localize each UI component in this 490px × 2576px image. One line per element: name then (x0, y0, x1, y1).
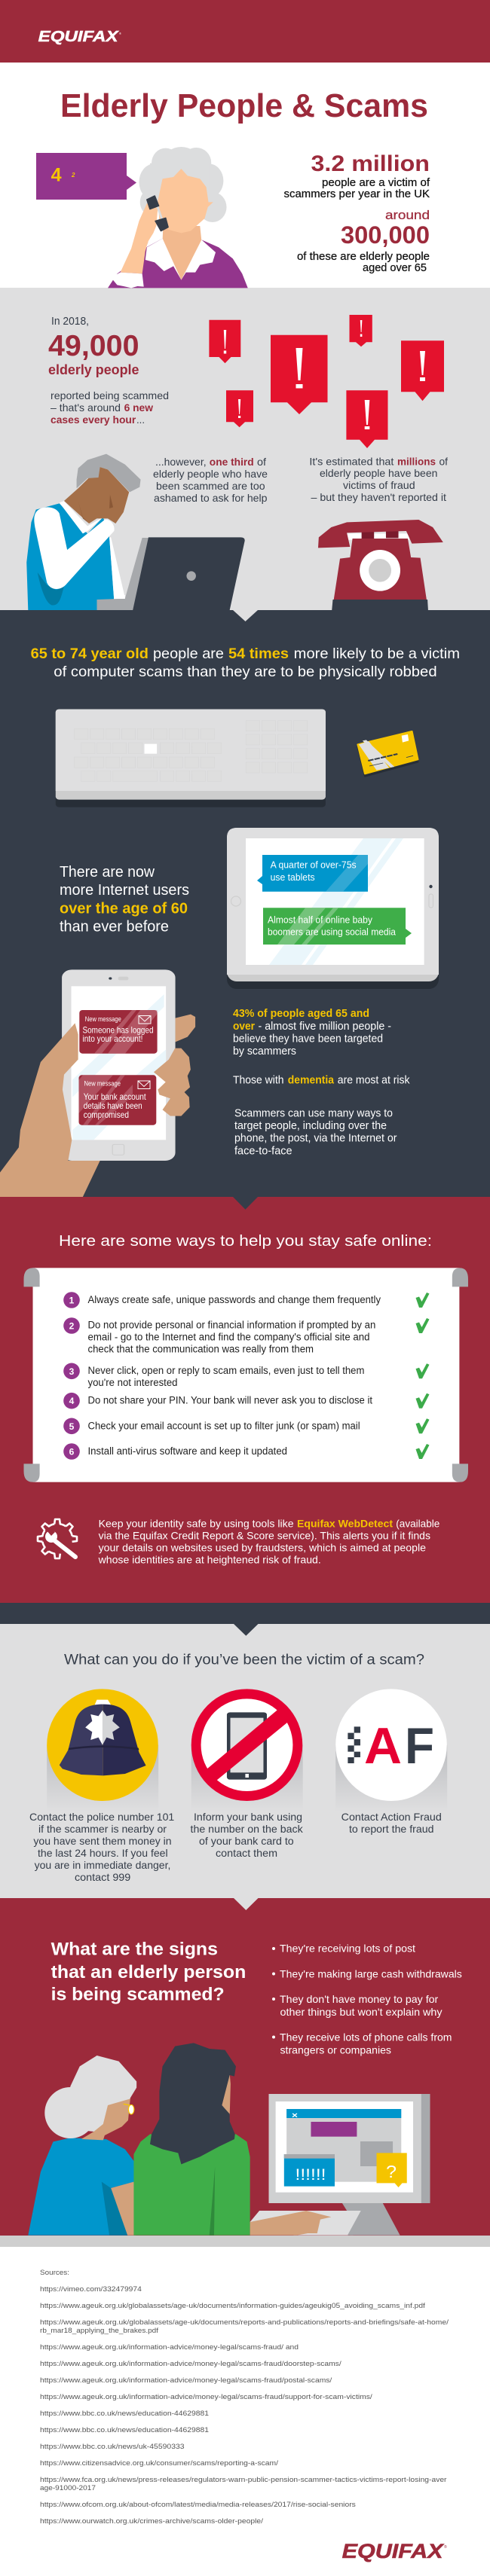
text: more internet users over 60 (60, 863, 189, 935)
blue message bubble: use tablets (271, 872, 315, 883)
item 1: 1 (69, 1296, 75, 1306)
text: many ways to target: Scammers can use many ways to (234, 1106, 393, 1119)
item 6: Install anti-virus software and keep it updated (87, 1445, 287, 1457)
stat: 49,000 elderly people (48, 315, 169, 426)
text: contact police: the last 24 hours. If you feel (38, 1847, 168, 1859)
scroll panel shape (24, 1268, 468, 1482)
stat: 3.2 million: scammers per year in the UK (283, 188, 430, 200)
green message bubble (263, 908, 412, 945)
text: millions not reported: It's estimated that (309, 455, 394, 467)
text: sources (40, 2269, 449, 2525)
logo: Equifax top: EQUIFAX (38, 29, 120, 45)
stat: 49,000 elderly people: elderly people (48, 362, 139, 377)
text: contact police: contact 999 (75, 1871, 131, 1883)
text: 43 percent targeted: - almost five million people - (258, 1020, 391, 1033)
green message bubble: Almost half of online baby (268, 914, 373, 925)
text: sources: https://www.ourwatch.org.uk/crimes-archive/scams-older-people/ (40, 2517, 263, 2525)
item 2: check that the communication was really from them (87, 1344, 314, 1355)
text: sources: https://vimeo.com/332479974 (40, 2285, 142, 2293)
item 2: email - go to the Internet and find the company's official site and (87, 1332, 369, 1343)
text: one third ashamed: ashamed to ask for help (154, 492, 268, 504)
item 1 (63, 1292, 429, 1308)
text: 54 times more likely: people are (153, 646, 224, 662)
text: sources: https://www.citizensadvice.org.uk/consumer/scams/reporting-a-scam/ (40, 2459, 278, 2467)
icon: police helmet (47, 1689, 158, 1811)
text: many ways to target (234, 1106, 397, 1157)
heading: signs of scam (51, 1940, 246, 2005)
text: contact police: Contact the police number 101 (29, 1811, 175, 1823)
text: 43 percent targeted (233, 1007, 391, 1058)
text: dementia: dementia (288, 1073, 335, 1086)
illustration: ashamed man at laptop (26, 454, 245, 610)
text: sources: https://www.bbc.co.uk/news/education-44629881 (40, 2410, 209, 2417)
speech bubble: purple (36, 153, 136, 200)
illustration: hand holding phone (0, 969, 195, 1197)
text: contact action fraud: Contact Action Fraud (341, 1811, 442, 1823)
text: contact police: you are in immediate danger, (35, 1859, 170, 1871)
text: inform your bank: the number on the back (190, 1823, 304, 1835)
text: contact police: you have sent them money in (33, 1835, 172, 1847)
heading: victim of a scam: What can you do if you’ve been the victim of a scam? (64, 1652, 424, 1668)
text: contact action fraud: to report the fraud (349, 1823, 434, 1835)
item 5 (63, 1418, 429, 1434)
message: bank details compromised: compromised (84, 1109, 129, 1120)
speech bubble: purple: 2 (71, 172, 75, 179)
text: 43 percent targeted: over (233, 1020, 255, 1033)
icon: Action Fraud logo: F (405, 1717, 434, 1775)
item 1: Always create safe, unique passwords and change them frequently (87, 1294, 381, 1305)
item 2 (63, 1317, 429, 1355)
speech bubble: purple: 4 (51, 165, 62, 186)
text: 43 percent targeted: believe they have been targeted (233, 1033, 383, 1045)
stat: 3.2 million (283, 151, 430, 200)
text: dementia: Those with (233, 1073, 283, 1086)
message: someone has logged in: Someone has logged (83, 1024, 154, 1035)
text: sources: Sources: (40, 2269, 69, 2276)
text: many ways to target: target people, including over the (234, 1119, 387, 1132)
monitor labels (292, 2111, 397, 2184)
item 2: Do not provide personal or financial information if prompted by an (87, 1320, 375, 1331)
item 3: Never click, open or reply to scam emails, even just to tell them (87, 1365, 364, 1376)
text: one third ashamed: ...however, (155, 456, 207, 468)
text: contact police (29, 1811, 175, 1883)
text: millions not reported: – but they haven't reported it (311, 491, 446, 503)
text: sources: https://www.ageuk.org.uk/information-advice/money-legal/scams-fraud/doorstep-scams/ (40, 2360, 341, 2367)
text: inform your bank: contact them (216, 1847, 277, 1859)
text: millions not reported: victims of fraud (343, 479, 415, 491)
monitor labels: × (292, 2111, 298, 2120)
list: warning signs: other things but won't explain why (280, 2006, 443, 2018)
text: more internet users over 60: over the age of 60 (60, 900, 188, 917)
text: one third ashamed: elderly people who have (153, 468, 268, 480)
text: Equifax WebDetect (98, 1517, 439, 1565)
list: warning signs: They receive lots of phone calls from (280, 2031, 452, 2043)
item 4: Do not share your PIN. Your bank will never ask you to disclose it (87, 1395, 372, 1406)
item 6 (63, 1443, 429, 1460)
text: many ways to target: phone, the post, via the Internet or (234, 1132, 397, 1145)
item 5: 5 (69, 1421, 75, 1432)
message: bank details compromised (78, 1075, 156, 1125)
blue message bubble (257, 855, 368, 892)
item 6: 6 (69, 1446, 75, 1457)
icons: alert speech bubbles (209, 315, 444, 448)
logo: Equifax bottom: ® (444, 2544, 447, 2550)
younger woman (133, 2043, 250, 2236)
stat: 49,000 elderly people: reported being scammed (51, 389, 169, 401)
illustration: red rotary phone (318, 520, 443, 610)
message: someone has logged in: New message (85, 1015, 121, 1024)
text: sources: https://www.ofcom.org.uk/about-ofcom/latest/media/media-releases/2017/rise-social-seniors (40, 2501, 356, 2508)
text: Equifax WebDetect: Keep your identity safe by using tools like (99, 1517, 294, 1529)
text: millions not reported: millions (397, 455, 436, 467)
header band (0, 0, 490, 63)
stat: 49,000 elderly people: 6 new (124, 401, 153, 414)
message: someone has logged in: into your account! (83, 1033, 143, 1044)
hand behind and palm (0, 969, 195, 1197)
stat: 300,000 (297, 208, 430, 274)
text: 43 percent targeted: by scammers (233, 1045, 296, 1058)
text: contact action fraud (341, 1811, 442, 1835)
stat: 49,000 elderly people: – that's around (51, 401, 121, 414)
text: more internet users over 60: There are now (60, 863, 155, 881)
item 4: 4 (69, 1396, 75, 1406)
message: bank details compromised: New message (84, 1080, 121, 1088)
icon: no phone sign (191, 1689, 303, 1811)
text: sources: age-91000-2017 (40, 2484, 96, 2492)
text: 54 times more likely: 54 times (228, 646, 289, 662)
text: 54 times more likely: of computer scams than they are to be physically robbed (54, 664, 437, 680)
text: millions not reported: elderly people have been (320, 467, 437, 479)
icon: Action Fraud logo (335, 1689, 447, 1811)
text: one third ashamed: been scammed are too (156, 480, 265, 492)
logo: Equifax top: ® (119, 32, 121, 35)
monitor labels: !!!!!! (296, 2166, 326, 2184)
older woman (28, 2056, 136, 2236)
text: inform your bank (190, 1811, 304, 1859)
stat: 3.2 million: 3.2 million (311, 151, 430, 176)
text: millions not reported: of (439, 455, 448, 467)
text: Equifax WebDetect: (available (396, 1517, 439, 1529)
item 5: Check your email account is set up to filter junk (or spam) mail (87, 1420, 360, 1431)
list: warning signs: strangers or companies (280, 2043, 391, 2056)
text: Equifax WebDetect: via the Equifax Credit Report & Score service). This alerts you if it finds (99, 1529, 430, 1541)
text: inform your bank: of your bank card to (199, 1835, 294, 1847)
list: warning signs: They're making large cash withdrawals (280, 1967, 462, 1979)
item 2: 2 (69, 1321, 75, 1332)
heading: signs of scam: that an elderly person (51, 1962, 246, 1982)
heading: signs of scam: What are the signs (51, 1940, 218, 1960)
text: sources: https://www.bbc.co.uk/news/uk-45590333 (40, 2443, 185, 2450)
message: bank details compromised: Your bank account (84, 1091, 146, 1102)
heading: stay safe online: Here are some ways to help you stay safe online: (59, 1232, 432, 1250)
stat: 49,000 elderly people: In 2018, (51, 315, 89, 328)
stat: 49,000 elderly people: 49,000 (48, 330, 139, 362)
blue message bubble: A quarter of over-75s (271, 860, 357, 871)
stat: 300,000: of these are elderly people (297, 250, 430, 263)
arrow: grey notch into red section (234, 1898, 258, 1910)
text: one third ashamed: of (257, 456, 266, 468)
icon: Action Fraud logo: A (364, 1717, 402, 1775)
text: Equifax WebDetect: your details on websites used by fraudsters, which is aimed at people (99, 1541, 426, 1553)
green message bubble: boomers are using social media (268, 927, 396, 938)
stat: 49,000 elderly people: cases every hour (51, 414, 136, 426)
icon: gear and wrench (38, 1519, 77, 1558)
panel: safety checklist (24, 1268, 468, 1482)
text: 54 times more likely (31, 646, 460, 680)
text: many ways to target: face-to-face (234, 1144, 292, 1157)
illustration: two women at computer (28, 2043, 430, 2236)
tablet buttons (231, 885, 433, 908)
list: warning signs (272, 1943, 462, 2056)
list: warning signs: They don't have money to pay for (280, 1993, 439, 2005)
text: sources: https://www.bbc.co.uk/news/education-44629881 (40, 2426, 209, 2434)
message: bank details compromised: details have been (84, 1100, 142, 1111)
text: sources: https://www.ageuk.org.uk/information-advice/money-legal/scams-fraud/ and (40, 2343, 299, 2351)
arrow: dark notch into grey section (234, 1624, 258, 1636)
text: Equifax WebDetect: Equifax WebDetect (297, 1517, 393, 1529)
item 4 (63, 1393, 429, 1409)
list: warning signs: They're receiving lots of post (280, 1943, 415, 1955)
stat: 300,000: 300,000 (341, 221, 430, 249)
monitor labels: ? (386, 2162, 397, 2181)
text: sources: rb_mar18_applying_the_brakes.pdf (40, 2327, 158, 2334)
illustration: bank card (358, 731, 418, 777)
text: sources: https://www.ageuk.org.uk/information-advice/money-legal/scams-fraud/support-for-scam-victims/ (40, 2393, 372, 2401)
keyboard, stand and hand (250, 2203, 400, 2236)
title: Elderly People & Scams (60, 87, 428, 124)
text: 43 percent targeted: 43% of people aged 65 and (233, 1007, 369, 1020)
text: more internet users over 60: than ever before (60, 918, 169, 935)
text: 54 times more likely: 65 to 74 year old (31, 646, 149, 662)
stat: 300,000: aged over 65 (363, 261, 427, 274)
stat: 3.2 million: people are a victim of (322, 176, 430, 189)
stat: 300,000: around (385, 208, 430, 222)
monitor (269, 2094, 430, 2203)
text: 54 times more likely: more likely to be a victim (294, 646, 460, 662)
text: more internet users over 60: more Internet users (60, 881, 189, 899)
text: inform your bank: Inform your bank using (194, 1811, 302, 1823)
text: Equifax WebDetect: whose identities are at heightened risk of fraud. (98, 1553, 321, 1565)
text: one third ashamed (153, 456, 268, 504)
text: dementia (233, 1073, 410, 1086)
text: sources: https://www.ageuk.org.uk/information-advice/money-legal/scams-fraud/postal-scams/ (40, 2376, 332, 2384)
text: sources: https://www.ageuk.org.uk/globalassets/age-uk/documents/reports-and-publications/reports-and-briefings/safe-at-home/ (40, 2318, 449, 2326)
arrow: dark notch into red section (233, 1197, 258, 1210)
text: sources: https://www.fca.org.uk/news/press-releases/regulators-warn-public-pension-scammer-tactics-victims-report-losing-aver (40, 2476, 446, 2483)
text: sources: https://www.ageuk.org.uk/globalassets/age-uk/documents/information-guides/ageukig05_avoiding_scams_inf.pdf (40, 2302, 425, 2309)
logo: Equifax bottom: EQUIFAX (342, 2540, 445, 2562)
text: one third ashamed: one third (210, 456, 254, 468)
illustration: keyboard (56, 710, 326, 807)
text: millions not reported (309, 455, 448, 503)
item 3: 3 (69, 1366, 75, 1377)
illustration: elderly woman on phone (108, 147, 248, 288)
item 3: you're not interested (87, 1377, 178, 1388)
text: contact police: if the scammer is nearby or (38, 1823, 167, 1835)
text: dementia: are most at risk (338, 1073, 410, 1086)
illustration: tablet (227, 828, 439, 989)
heading: signs of scam: is being scammed? (51, 1985, 225, 2005)
item 3 (63, 1363, 429, 1388)
message: someone has logged in (79, 1010, 158, 1054)
arrow: grey notch into dark section (233, 610, 258, 621)
stat: 49,000 elderly people: ... (136, 414, 145, 426)
